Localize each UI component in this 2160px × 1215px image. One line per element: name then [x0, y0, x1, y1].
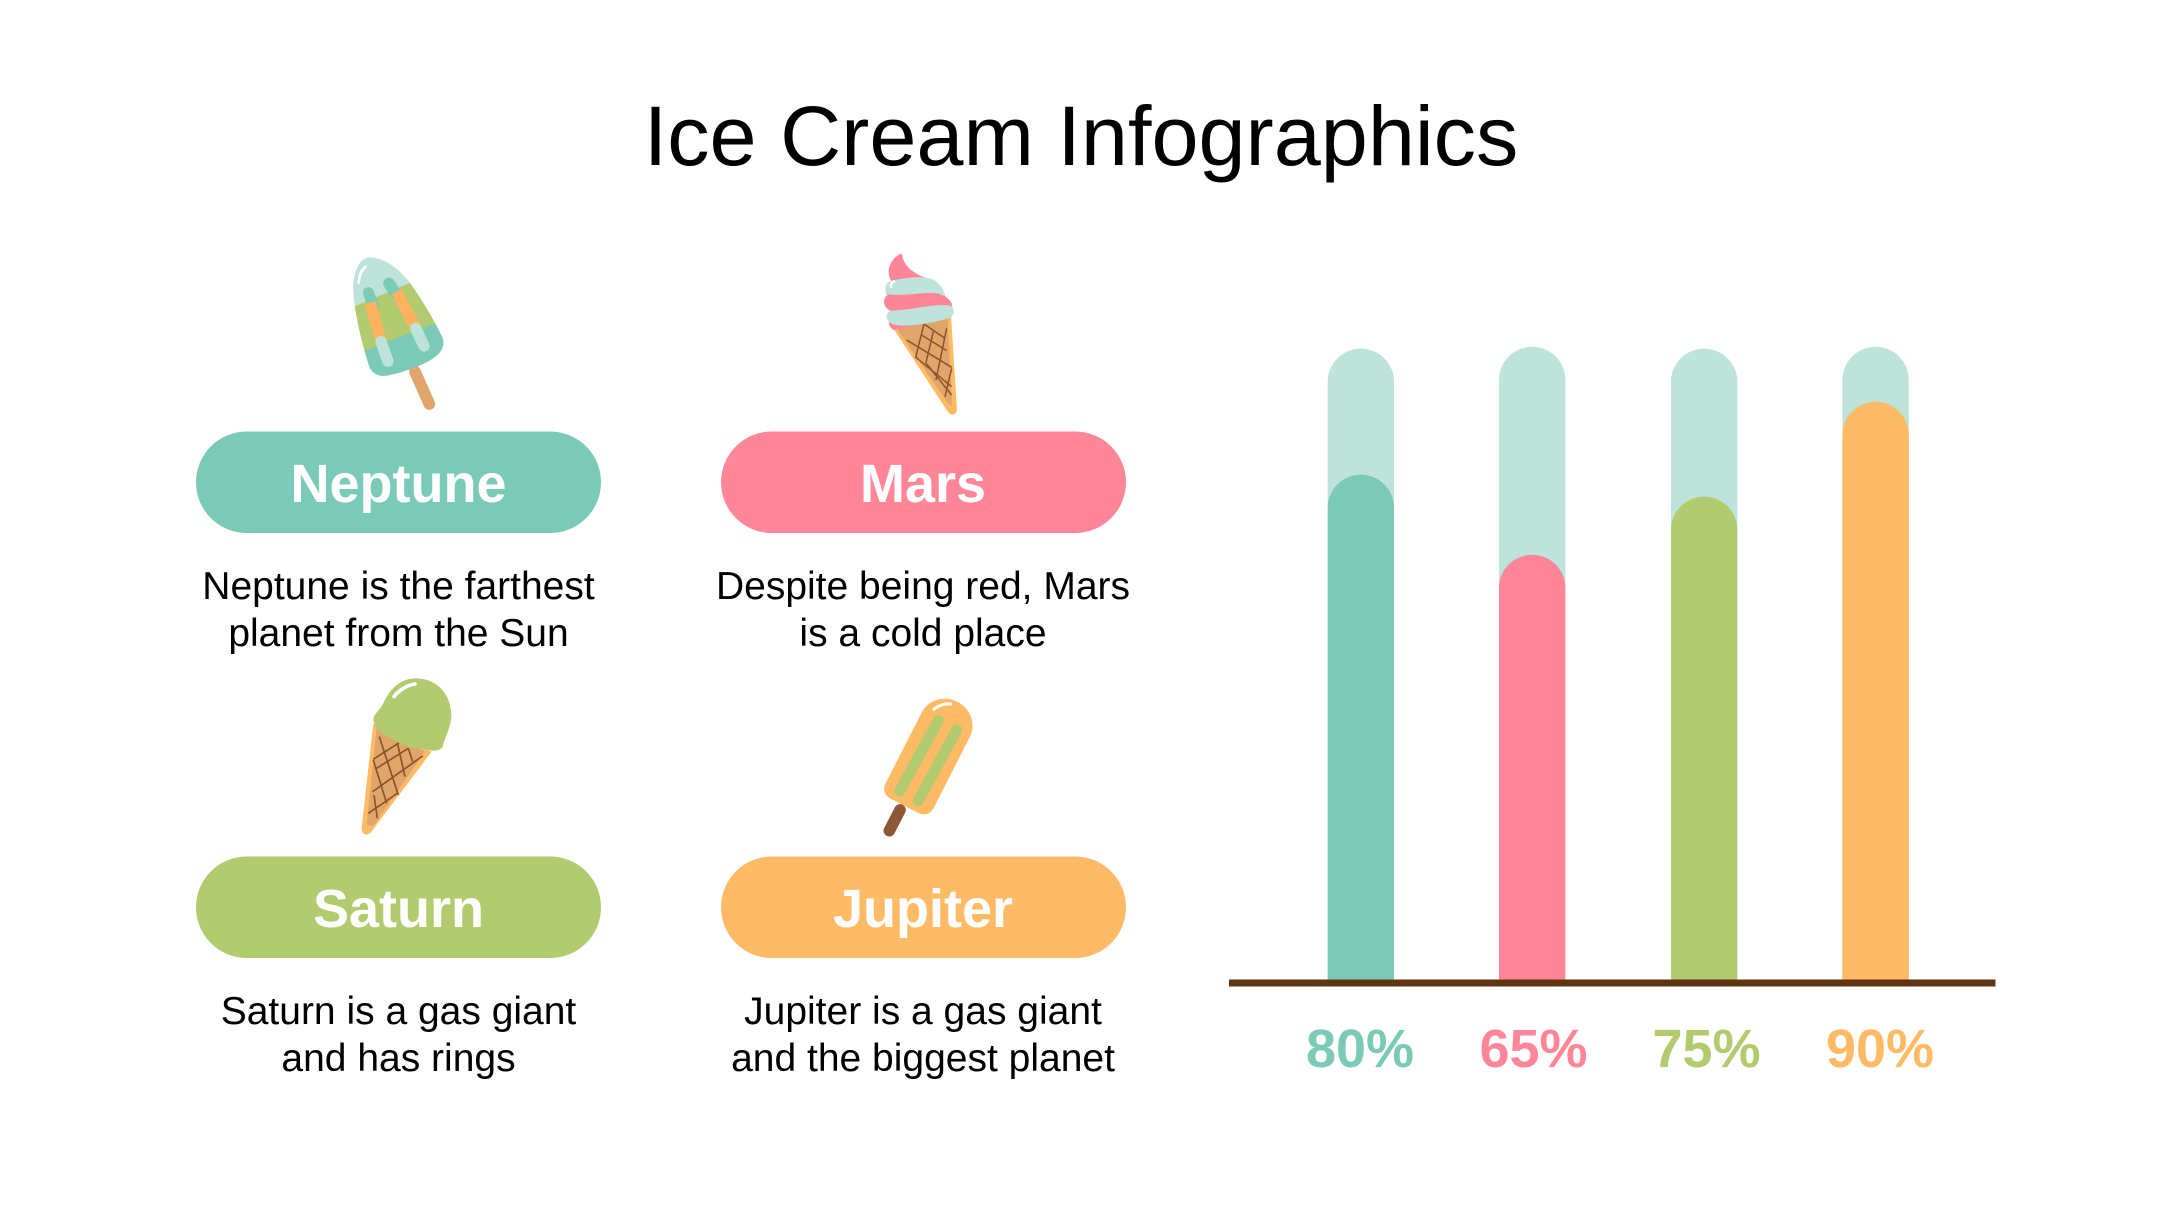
panel: Neptune — [196, 250, 601, 655]
pill: Jupiter — [721, 856, 1126, 958]
value label: 65%: 65% — [1479, 1019, 1588, 1079]
icon: striped popsicle — [353, 258, 444, 410]
panel: Saturn — [196, 678, 601, 1080]
pill: Mars — [721, 432, 1126, 533]
panel: Mars — [716, 253, 1130, 655]
title: Ice Cream Infographics — [644, 88, 1518, 183]
value label: 90%: 90% — [1826, 1019, 1934, 1079]
pill: Saturn — [196, 856, 601, 958]
icon: soft serve cone — [884, 253, 957, 415]
pill: Jupiter: Jupiter — [833, 879, 1013, 939]
description: Neptune: planet from the Sun — [228, 612, 569, 655]
description: Neptune: Neptune is the farthest — [202, 565, 595, 608]
description: Saturn: Saturn is a gas giant — [221, 990, 576, 1033]
description: Jupiter: Jupiter is a gas giant — [744, 990, 1102, 1033]
value label: 75%: 75% — [1652, 1019, 1761, 1079]
bar: 65% — [1499, 347, 1565, 981]
chart baseline — [1229, 980, 1996, 986]
pill: Saturn: Saturn — [313, 879, 484, 939]
pill: Neptune — [196, 432, 601, 533]
bar: 75% — [1671, 349, 1737, 981]
icon: scoop cone — [362, 678, 451, 835]
description: Saturn: and has rings — [281, 1037, 516, 1080]
bar: 90% — [1842, 347, 1909, 981]
value label: 80%: 80% — [1306, 1019, 1414, 1079]
pill: Mars: Mars — [860, 454, 986, 514]
panel: Jupiter — [721, 690, 1126, 1080]
description: Mars: Despite being red, Mars — [716, 565, 1130, 608]
icon: orange popsicle — [880, 690, 981, 831]
bar chart — [1229, 347, 1996, 1079]
description: Jupiter: and the biggest planet — [731, 1037, 1115, 1080]
pill: Neptune: Neptune — [290, 454, 506, 514]
bar: 80% — [1328, 349, 1394, 981]
description: Mars: is a cold place — [799, 612, 1047, 655]
